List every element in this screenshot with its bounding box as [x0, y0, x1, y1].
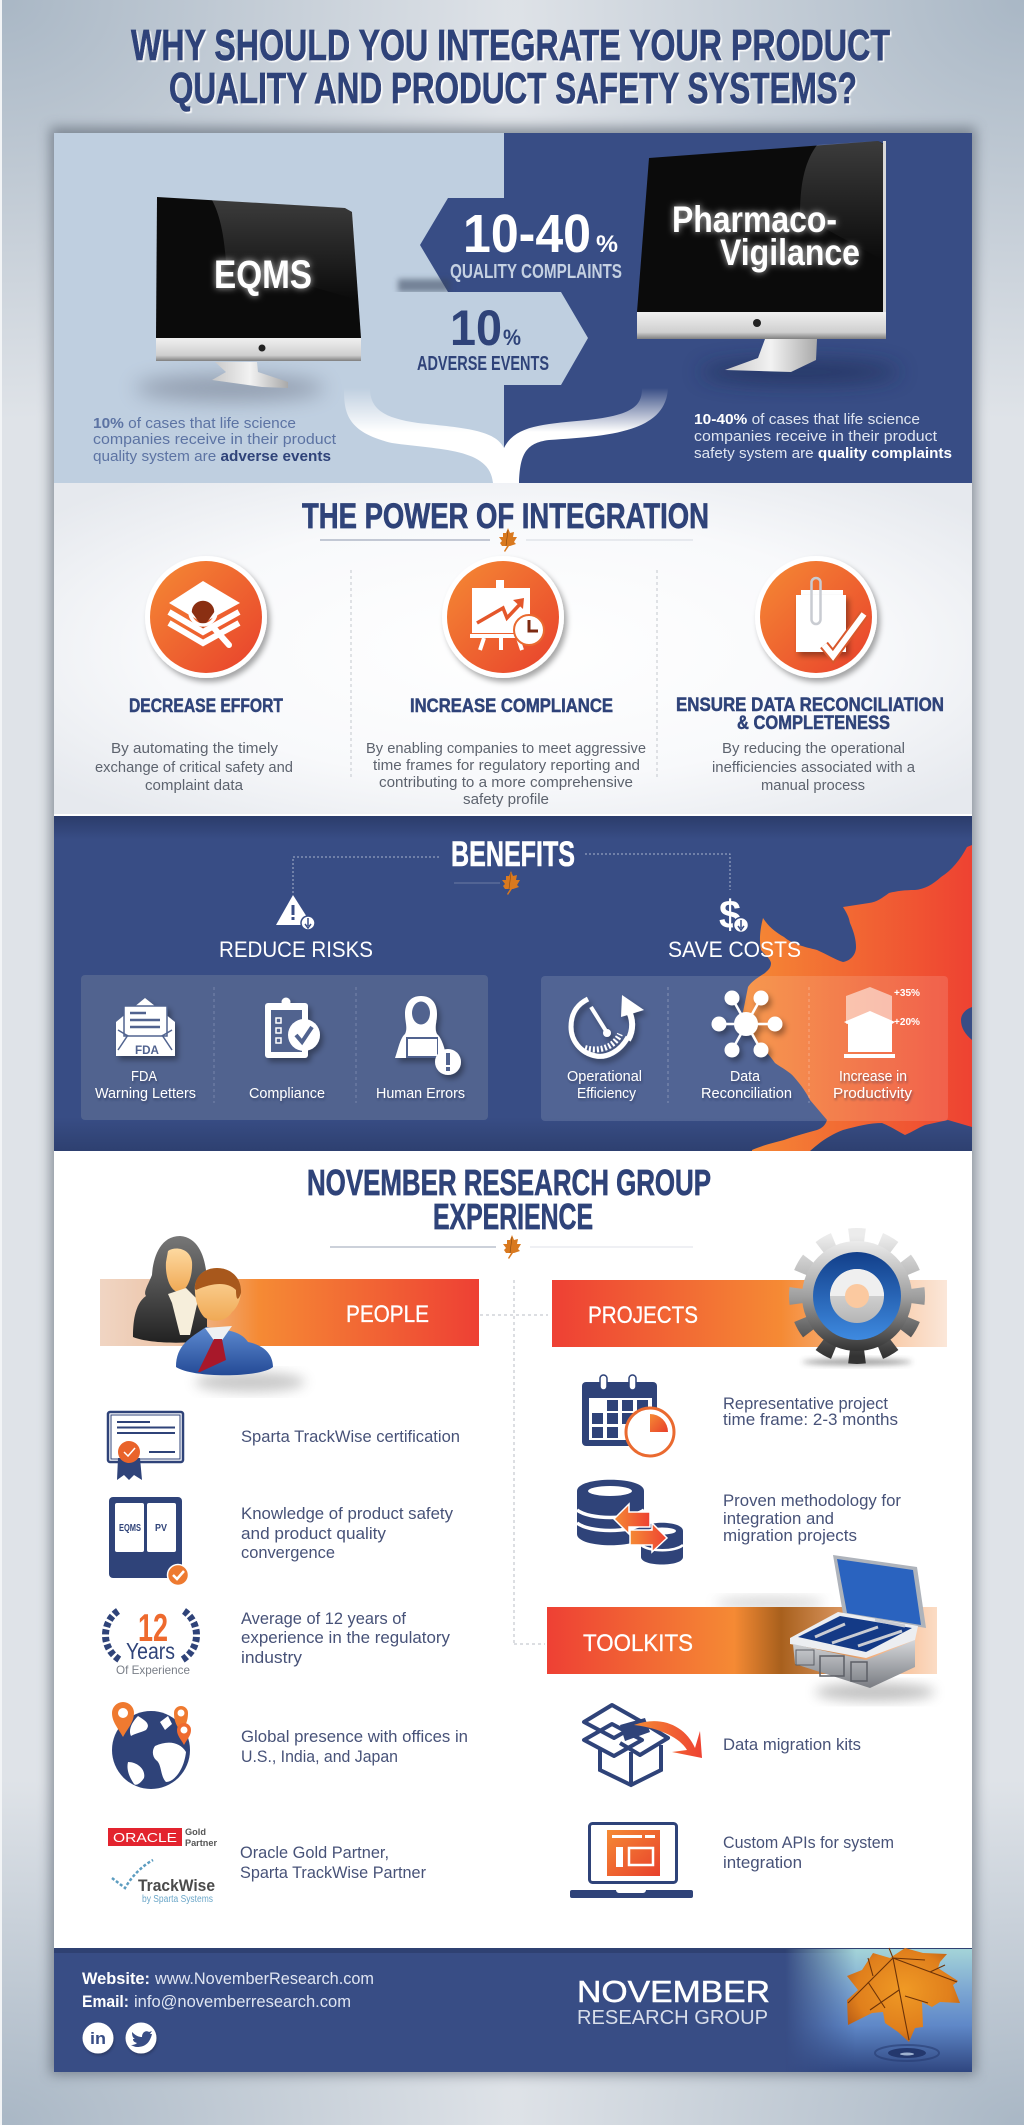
panel: risk cards: FDA — [131, 1069, 157, 1085]
column: increase compliance: safety profile — [463, 791, 549, 808]
item: methodology: integration and — [723, 1509, 834, 1528]
logo: Oracle: ORACLE — [113, 1831, 177, 1845]
heading: experience: EXPERIENCE — [433, 1196, 593, 1237]
arrow: adverse events — [327, 292, 588, 385]
column: decrease effort: By automating the timely — [111, 740, 279, 757]
arrow: adverse events: ADVERSE EVENTS — [417, 353, 549, 375]
icon: gear — [797, 1236, 917, 1365]
item: time frame — [582, 1375, 898, 1456]
contact details: info@novemberresearch.com — [134, 1992, 351, 2011]
icon: box — [584, 1705, 702, 1785]
item: methodology: migration projects — [723, 1526, 857, 1545]
panel: risk cards: Compliance — [249, 1086, 325, 1102]
icon: calendar — [582, 1375, 674, 1456]
item: certification: Sparta TrackWise certification — [241, 1427, 460, 1446]
section: projects: PROJECTS — [588, 1302, 698, 1329]
panel: cost cards — [541, 976, 948, 1121]
logo: Oracle — [108, 1827, 218, 1848]
arrow: quality complaints: 10-40 — [463, 204, 591, 264]
panel: cost cards: Reconciliation — [701, 1086, 792, 1102]
column: decrease effort — [95, 696, 293, 794]
arrow: adverse events: % — [503, 325, 521, 350]
section: projects — [552, 1236, 947, 1365]
column: decrease effort: complaint data — [145, 777, 244, 794]
heading: experience — [307, 1162, 711, 1237]
heading: benefits: BENEFITS — [451, 835, 575, 874]
text: quality complaints note: companies receive in their product — [694, 428, 938, 445]
logo: TrackWise: TrackWise — [138, 1876, 215, 1895]
icon: book — [109, 1497, 188, 1586]
item: global presence: U.S., India, and Japan — [241, 1747, 398, 1766]
item: global presence — [112, 1702, 468, 1789]
heading: the power of integration: THE POWER OF INTEGRATION — [302, 497, 709, 536]
arrow: adverse events: 10 — [450, 300, 502, 356]
panel: footer — [54, 1948, 972, 2072]
text: adverse events note: companies receive in their product — [93, 431, 337, 448]
item: partners: Sparta TrackWise Partner — [240, 1863, 426, 1882]
icon: FDA warning letters: FDA — [135, 1043, 159, 1057]
column: decrease effort: DECREASE EFFORT — [129, 696, 283, 717]
monitor: EQMS: EQMS — [214, 253, 312, 297]
column: data reconciliation: By reducing the operational — [722, 740, 905, 757]
contact details: www.NovemberResearch.com — [154, 1969, 374, 1988]
text: quality complaints note — [694, 411, 952, 462]
panel: the power of integration — [54, 483, 972, 816]
column: increase compliance: INCREASE COMPLIANCE — [410, 696, 613, 717]
logo: TrackWise: by Sparta Systems — [142, 1894, 213, 1905]
panel: cost cards: Operational — [567, 1069, 642, 1085]
group: save costs — [541, 893, 948, 1121]
leaf divider — [454, 871, 520, 895]
panel: cost cards: Efficiency — [577, 1086, 637, 1102]
item: custom APIs — [570, 1824, 894, 1898]
section: people — [100, 1236, 479, 1392]
panel: November Research Group experience — [54, 1151, 972, 1948]
item: partners: Oracle Gold Partner, — [240, 1843, 389, 1862]
item: methodology: Proven methodology for — [723, 1491, 901, 1510]
heading divider — [330, 1235, 693, 1259]
item: global presence: Global presence with offices in — [241, 1727, 468, 1746]
section: toolkits: TOOLKITS — [583, 1630, 693, 1657]
column: increase compliance: time frames for regulatory reporting and — [373, 757, 640, 774]
footer photo: water backdrop — [785, 1949, 972, 2072]
contact details — [82, 1969, 374, 2011]
icon: warning — [276, 895, 315, 930]
item: years of experience: Average of 12 years of — [241, 1609, 406, 1628]
item: convergence — [109, 1497, 453, 1586]
icon: book: PV — [155, 1523, 167, 1534]
column: data reconciliation: inefficiencies associated with a — [712, 759, 916, 776]
item: years of experience: experience in the regulatory — [241, 1628, 450, 1647]
logo: November Research Group: NOVEMBER — [577, 1974, 770, 2009]
icon: laptop — [570, 1824, 693, 1898]
column: increase compliance: contributing to a more comprehensive — [379, 774, 633, 791]
item: time frame: Representative project — [723, 1394, 888, 1413]
panel: cost cards: Data — [730, 1069, 761, 1085]
contact details: Email: — [82, 1992, 129, 2011]
section: toolkits — [547, 1555, 937, 1701]
text: quality complaints note: 10-40% of cases that life science — [694, 411, 920, 428]
icon: databases — [577, 1480, 683, 1564]
monitor: EQMS — [135, 197, 361, 401]
arrow: quality complaints: QUALITY COMPLAINTS — [450, 261, 622, 283]
item: years of experience — [106, 1607, 450, 1677]
icon: data reconciliation — [755, 556, 877, 678]
contact details: Website: — [82, 1969, 150, 1988]
icon: dollar: $ — [719, 893, 741, 937]
column: data reconciliation: ENSURE DATA RECONCILIATION — [676, 695, 944, 716]
panel: benefits — [54, 814, 972, 1151]
icon: FDA warning letters — [116, 998, 175, 1057]
icon: laurel badge: Of Experience — [116, 1663, 190, 1677]
item: migration kits — [584, 1705, 861, 1785]
item: custom APIs: Custom APIs for system — [723, 1833, 894, 1852]
item: convergence: convergence — [241, 1543, 335, 1562]
icon: certificate — [108, 1412, 183, 1480]
heading: experience: NOVEMBER RESEARCH GROUP — [307, 1162, 711, 1203]
icon: Twitter — [126, 2022, 156, 2054]
item: convergence: Knowledge of product safety — [241, 1504, 453, 1523]
icon: LinkedIn: in — [90, 2029, 106, 2048]
item: time frame: time frame: 2-3 months — [723, 1410, 898, 1429]
column: data reconciliation: & COMPLETENESS — [737, 713, 890, 734]
icon: data reconciliation network — [712, 990, 782, 1058]
logo: November Research Group: RESEARCH GROUP — [577, 2007, 768, 2029]
icon: decrease effort — [145, 556, 267, 678]
item: partners — [108, 1827, 426, 1905]
panel: risk cards: Human Errors — [376, 1086, 465, 1102]
text: adverse events note: 10% of cases that life science — [93, 415, 296, 432]
funnel bracket — [344, 388, 668, 483]
logo: November Research Group — [577, 1974, 770, 2029]
monitor: Pharmacovigilance: Vigilance — [720, 232, 860, 273]
group: reduce risks: REDUCE RISKS — [219, 937, 373, 962]
item: convergence: and product quality — [241, 1524, 387, 1543]
item: certification — [108, 1412, 460, 1480]
group: save costs: SAVE COSTS — [668, 937, 801, 962]
icon: laurel badge: Years — [126, 1638, 175, 1664]
icon: laurel badge — [106, 1607, 196, 1677]
monitor: Pharmacovigilance: Pharmaco- — [672, 199, 837, 240]
panel: risk cards — [81, 975, 488, 1120]
text: adverse events note — [93, 415, 337, 465]
illustration: maple leaf and ripple — [847, 1948, 960, 2061]
icon: productivity arrows: +35% — [894, 988, 920, 999]
column: data reconciliation: manual process — [761, 777, 865, 794]
panel: cost cards: Productivity — [833, 1086, 913, 1102]
group: reduce risks — [81, 895, 488, 1120]
column: increase compliance — [366, 696, 646, 808]
panel: risk cards: Warning Letters — [95, 1086, 196, 1102]
column: increase compliance: By enabling companies to meet aggressive — [366, 740, 646, 757]
column: data reconciliation — [676, 695, 944, 794]
logo: Oracle: Gold — [185, 1827, 206, 1837]
icon: compliance — [265, 998, 320, 1058]
panel: cost cards: Increase in — [839, 1069, 907, 1085]
section: people: PEOPLE — [346, 1301, 429, 1328]
text: adverse events note: quality system are adverse events — [93, 448, 331, 465]
arrow: quality complaints: % — [596, 231, 618, 258]
logo: TrackWise — [112, 1860, 215, 1905]
panel: EQMS and pharmacovigilance hero — [54, 133, 972, 483]
heading divider — [320, 528, 693, 552]
text: quality complaints note: safety system are quality complaints — [694, 445, 952, 462]
icon: book: EQMS — [119, 1523, 141, 1534]
item: methodology — [577, 1480, 901, 1564]
icon: productivity arrows: +20% — [894, 1017, 920, 1028]
icon: toolkit case — [790, 1555, 935, 1701]
icon: laurel badge: 12 — [138, 1607, 168, 1650]
icon: productivity arrows — [844, 987, 920, 1058]
item: migration kits: Data migration kits — [723, 1735, 861, 1754]
title — [131, 21, 890, 113]
monitor: Pharmacovigilance — [637, 141, 900, 384]
icon: LinkedIn — [82, 2022, 114, 2054]
orange maple leaf backdrop — [742, 845, 972, 1151]
arrow shadow — [398, 279, 450, 292]
icon: increase compliance — [442, 556, 564, 678]
icon: human errors — [395, 996, 461, 1075]
icon: globe — [112, 1702, 191, 1789]
arrow: quality complaints — [420, 198, 660, 292]
item: years of experience: industry — [241, 1648, 303, 1667]
logo: Oracle: Partner — [185, 1838, 218, 1848]
column: decrease effort: exchange of critical safety and — [95, 759, 293, 776]
item: custom APIs: integration — [723, 1853, 802, 1872]
icon: people — [133, 1236, 305, 1392]
icon: operational efficiency — [571, 995, 644, 1056]
